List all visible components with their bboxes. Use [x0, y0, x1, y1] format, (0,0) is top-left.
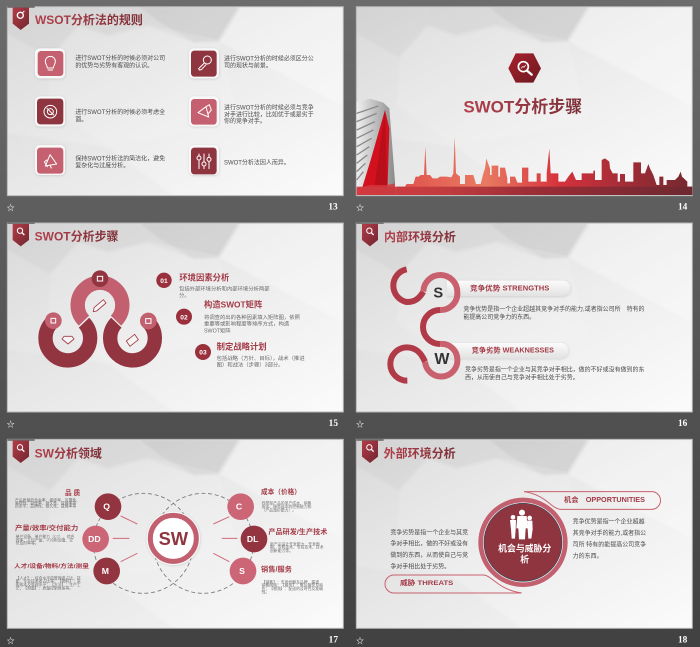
- right dark loop: [110, 322, 155, 360]
- right node: [140, 313, 157, 329]
- pill: strengths: 竞争优势 STRENGTHS: [470, 283, 550, 292]
- S-curve ribbon: [390, 269, 457, 381]
- slide 15: SWOT steps: [7, 223, 343, 429]
- center circle: [478, 498, 568, 587]
- text: rule 2: 司的现状与前景。: [224, 62, 272, 70]
- badge 03: 03: [199, 350, 207, 357]
- text: strengths: 能提高公司竞争力的东西。: [463, 313, 535, 321]
- header ribbon: [356, 223, 384, 246]
- skyscraper photo: [357, 99, 395, 195]
- center SW circle: [147, 512, 200, 565]
- text: rule 2: 进行SWOT分析的时候必须区分公: [224, 56, 314, 62]
- center label: 机会与威胁分: [498, 543, 551, 553]
- text: threats: 竞争劣势是指一个企业与其竞: [390, 530, 468, 536]
- slide panel: [356, 439, 692, 628]
- text: weaknesses: 西，从而使自己与竞争对手相比处于劣势。: [465, 373, 579, 381]
- node DD: [82, 526, 109, 552]
- left node: [45, 312, 62, 329]
- label: quality: 美观性、返修率、耐久性、故障率等: [15, 500, 76, 505]
- label: sales: 销售/服务: [261, 565, 292, 574]
- node M: [93, 558, 120, 584]
- pill: strengths: [447, 281, 570, 296]
- step 2: SWOT矩阵: [204, 326, 231, 334]
- text: rule 3: 面。: [75, 116, 87, 123]
- badge 02: 02: [180, 314, 188, 321]
- label: R&D: 创新能力等。: [270, 548, 293, 553]
- text: threats: 争对手相比，做的不好或没有: [390, 540, 468, 548]
- text: opportunities: 司所 特有的能提高公司竞争: [573, 540, 646, 548]
- tile: flask bell: [189, 96, 219, 126]
- title: SW分析领域: [35, 445, 102, 460]
- text: threats: 争对手相比处于劣势。: [390, 562, 450, 570]
- icon: business people: [510, 510, 533, 539]
- text: opportunities: 力的东西。: [573, 552, 603, 560]
- title: 外部环境分析: [384, 445, 456, 460]
- label: people: 购成本及管理水平；【方法】：生产工: [16, 582, 81, 587]
- step 3: [217, 341, 305, 369]
- footer star: ☆: [7, 204, 15, 213]
- text: opportunities: 竞争优势是指一个企业超越: [573, 519, 644, 525]
- node S: [230, 558, 256, 584]
- slide 17: SW analysis areas: [7, 439, 343, 645]
- text: rule 4: 进行SWOT分析的时候必须与竞争: [224, 105, 314, 111]
- label: quality: 产品质量的合金率、报废率、可靠性、: [15, 498, 80, 502]
- label: output: [15, 523, 78, 546]
- footer star: ☆: [356, 636, 364, 645]
- title: SWOT分析步骤: [463, 97, 582, 117]
- tile: megaphone: [35, 145, 65, 175]
- header ribbon: [7, 439, 35, 463]
- slide 16: internal environment: [356, 223, 692, 429]
- label: R&D: 新产品设计开发能力、开发周: [270, 542, 320, 546]
- step 3: 图）和战法（步骤）3部分。: [217, 361, 284, 369]
- node Q: Q: [103, 502, 110, 512]
- label: cost: 成本（价格）: [261, 487, 301, 496]
- label: quality: 的水平、品牌性、耐久性、故障率等: [15, 503, 76, 508]
- footer star: ☆: [356, 420, 364, 429]
- center label: 析: [520, 553, 529, 564]
- text: threats: 做到的东西，从而使自己与竞: [390, 551, 468, 559]
- label: output: 效率、人均产量、人均附加值、交: [16, 537, 73, 542]
- slide panel: [356, 223, 692, 412]
- step 1: 分。: [179, 291, 190, 299]
- step 2: 将调查的出的各种因素填入矩阵图，依照: [204, 315, 300, 321]
- dashed orbit rings: [93, 493, 253, 593]
- node C: [227, 493, 254, 520]
- label: R&D: 期，专利技术、专有技术、技术: [270, 545, 324, 550]
- label: sales: 销售网络；【服务】：售后服务及响: [262, 583, 323, 588]
- step 2: 构造SWOT矩阵: [204, 300, 263, 310]
- page number: 13: [328, 203, 338, 213]
- letter S: S: [433, 285, 443, 301]
- page number: 18: [678, 635, 688, 645]
- label: sales: 【销售】：市场份额及品牌、渠道: [262, 580, 319, 584]
- tile: key: [189, 48, 219, 78]
- text: rule 1: 进行SWOT分析的时候必须对公司: [75, 56, 165, 62]
- pill: opportunities: [524, 492, 660, 509]
- step 1: 包括外部环境分析和内部环境分析两部: [179, 286, 270, 292]
- label: quality: 品 质: [65, 488, 81, 497]
- header ribbon: [356, 439, 384, 463]
- node C: C: [236, 502, 243, 512]
- page number: 15: [329, 419, 338, 429]
- node S: S: [239, 566, 245, 576]
- label: people: [14, 562, 89, 590]
- footer star: ☆: [356, 204, 364, 213]
- step 1: [179, 273, 270, 299]
- text: rule 5: 保持SWOT分析法的简洁化，避免: [75, 156, 165, 162]
- text: rule 4: 对手进行比较，比如优于或是劣于: [224, 110, 314, 118]
- text: rule 3: 进行SWOT分析的时候必须考虑全: [75, 110, 165, 116]
- pill: weaknesses: 竞争劣势 WEAKNESSES: [472, 346, 554, 355]
- three-loop diagram: [45, 270, 157, 360]
- pill: threats: [385, 575, 522, 593]
- pill: threats: 威胁 THREATS: [400, 578, 454, 587]
- node DD: DD: [88, 534, 101, 544]
- page number: 14: [678, 203, 688, 213]
- top node: [92, 270, 108, 287]
- icon: banknote: [126, 334, 138, 346]
- label: people: 能、专业技术者占比等；【物料】：采: [16, 579, 81, 584]
- slide 13: WSOT rules: [7, 6, 343, 213]
- label: people: 艺；【测量】：质量控制体系等。: [16, 585, 73, 590]
- title: 内部环境分析: [384, 229, 456, 244]
- footer star: ☆: [7, 420, 15, 429]
- label: R&D: 产品研发/生产技术: [268, 527, 328, 536]
- pill: opportunities: 机会 OPPORTUNITIES: [564, 495, 645, 504]
- city skyline: [357, 137, 692, 195]
- text: weaknesses: 竞争劣势是指一个企业与其竞争对手相比，做的不好或没有做到的东: [465, 368, 645, 374]
- label: quality: [15, 488, 81, 508]
- label: cost: [261, 487, 312, 512]
- label: cost: 成本、服务成本的控制能力和: [262, 504, 312, 509]
- slide panel: [7, 223, 343, 412]
- label: sales: 应；【物流】：配送的及时性及准确: [262, 586, 323, 591]
- center SW circle: SW: [159, 528, 189, 549]
- connector arrows: [113, 516, 237, 562]
- node M: M: [102, 566, 109, 576]
- label: people: 人才/设备/物料/方法/测量: [14, 562, 89, 570]
- label: output: 单产设备、单产能力（CT）、综合: [16, 535, 74, 539]
- label: people: 【人才】：综合水平的管理者占比、技: [16, 576, 81, 580]
- label: cost: 同类型产品的单产成本、销售: [262, 502, 311, 506]
- text: rule 6: SWOT分析法因人而异。: [224, 158, 290, 166]
- icon: pencil: [93, 300, 106, 312]
- page number: 16: [678, 419, 688, 429]
- badge 01: 01: [160, 278, 168, 285]
- text: rule 1: 的优势与劣势有客观的认识。: [75, 61, 153, 69]
- label: sales: 性。: [262, 589, 269, 594]
- label: output: 付及时率等。: [16, 541, 39, 546]
- tile: light bulb: [35, 48, 65, 78]
- footer star: ☆: [7, 636, 15, 645]
- badge 02: [176, 309, 192, 325]
- letter W: W: [434, 351, 450, 368]
- hexagon icon: [508, 53, 541, 83]
- label: R&D: [268, 527, 328, 553]
- step 2: [204, 300, 301, 334]
- page number: 17: [329, 635, 338, 645]
- text: strengths: 竞争优势是指一个企业超越其竞争对手的能力,或者指公司所 特有的: [463, 307, 645, 313]
- badge 03: [195, 344, 211, 360]
- step 1: 环境因素分析: [179, 273, 230, 283]
- title: WSOT分析法的规则: [35, 12, 143, 27]
- title: SWOT分析步骤: [35, 229, 119, 244]
- text: rule 4: 你的竞争对手。: [224, 117, 266, 125]
- node Q: [95, 493, 121, 520]
- slide panel: [7, 439, 343, 628]
- tile: sliders: [189, 145, 219, 175]
- icon: diamond: [62, 336, 74, 344]
- node DL: [241, 526, 267, 552]
- pill: weaknesses: [447, 343, 568, 358]
- tile: disc: [35, 96, 65, 126]
- badge 01: [156, 273, 172, 288]
- slide panel: [7, 7, 343, 196]
- slide 14: SWOT steps section cover: [356, 7, 692, 213]
- step 2: 重要等或影响程度等排序方式，构造: [204, 320, 290, 328]
- step 3: 制定战略计划: [217, 341, 267, 351]
- step 3: 包括战略（方针、目标），战术（推进: [217, 356, 305, 362]
- pink arch: [78, 283, 122, 321]
- header ribbon: [7, 6, 35, 30]
- label: sales: [261, 565, 323, 594]
- header ribbon: [7, 223, 35, 246]
- text: opportunities: 其竞争对手的能力,或者指公: [573, 529, 646, 537]
- slide panel: [356, 7, 692, 196]
- label: cost: （产品溢价能力）。: [262, 507, 296, 512]
- text: rule 5: 复杂化与过度分析。: [75, 162, 129, 170]
- left dark loop: [45, 322, 90, 360]
- node DL: DL: [247, 534, 259, 544]
- label: output: 产量/效率/交付能力: [15, 523, 78, 532]
- slide 18: external environment: [356, 439, 692, 645]
